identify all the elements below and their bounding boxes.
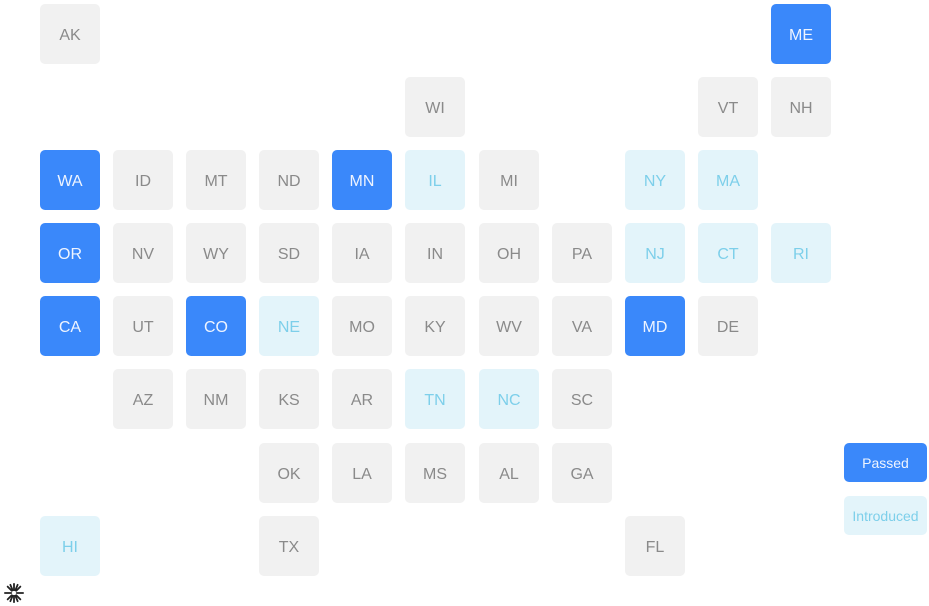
AR: AR	[351, 392, 373, 408]
MO: MO	[349, 318, 375, 336]
OH	[479, 223, 539, 283]
OK: OK	[277, 466, 301, 482]
VA: VA	[572, 318, 592, 336]
OR	[40, 223, 100, 283]
UT	[113, 296, 173, 356]
WV: WV	[496, 318, 522, 336]
NH: NH	[789, 100, 813, 116]
NC	[479, 369, 539, 429]
MN: MN	[350, 172, 374, 190]
legend: passed: Passed	[862, 454, 909, 470]
DE	[698, 296, 758, 356]
NJ: NJ	[645, 246, 665, 262]
icon: logo asterisk	[4, 583, 24, 603]
ME: ME	[789, 26, 813, 44]
NE	[259, 296, 319, 356]
TX: TX	[279, 538, 299, 556]
TN: TN	[424, 392, 446, 408]
GA: GA	[570, 466, 594, 482]
CO	[186, 296, 246, 356]
LA: LA	[352, 466, 372, 482]
IL	[405, 150, 465, 210]
VA	[552, 296, 612, 356]
legend: passed	[844, 443, 927, 482]
NY: NY	[644, 172, 666, 190]
legend	[844, 443, 927, 535]
CT: CT	[717, 246, 739, 262]
SD	[259, 223, 319, 283]
NC: NC	[497, 392, 521, 408]
AZ	[113, 369, 173, 429]
MD	[625, 296, 685, 356]
WI	[405, 77, 465, 137]
WY: WY	[203, 246, 229, 262]
MT: MT	[204, 172, 228, 190]
MT	[186, 150, 246, 210]
MS: MS	[423, 466, 447, 482]
PA: PA	[572, 246, 592, 262]
ND: ND	[277, 172, 301, 190]
ID: ID	[135, 172, 151, 190]
MA: MA	[716, 172, 740, 190]
TN	[405, 369, 465, 429]
NV: NV	[132, 246, 154, 262]
IA	[332, 223, 392, 283]
LA	[332, 443, 392, 503]
TX	[259, 516, 319, 576]
IL: IL	[428, 172, 442, 190]
AK: AK	[59, 26, 81, 44]
IN	[405, 223, 465, 283]
OK	[259, 443, 319, 503]
CO: CO	[204, 318, 228, 336]
CT	[698, 223, 758, 283]
MA	[698, 150, 758, 210]
AR	[332, 369, 392, 429]
HI	[40, 516, 100, 576]
CA	[40, 296, 100, 356]
KS	[259, 369, 319, 429]
KY	[405, 296, 465, 356]
IN: IN	[427, 246, 443, 262]
AL: AL	[499, 466, 519, 482]
ME	[771, 4, 831, 64]
NV	[113, 223, 173, 283]
OR: OR	[58, 246, 82, 262]
WA: WA	[57, 172, 83, 190]
legend: introduced: Introduced	[852, 508, 919, 524]
MO	[332, 296, 392, 356]
KS: KS	[278, 392, 300, 408]
AL	[479, 443, 539, 503]
AK	[40, 4, 100, 64]
NM: NM	[204, 392, 228, 408]
SC	[552, 369, 612, 429]
VT: VT	[718, 100, 738, 116]
FL	[625, 516, 685, 576]
OH: OH	[497, 246, 521, 262]
HI: HI	[62, 538, 78, 556]
NY	[625, 150, 685, 210]
RI	[771, 223, 831, 283]
legend: introduced	[844, 496, 927, 535]
SC: SC	[571, 392, 593, 408]
MI: MI	[500, 172, 518, 190]
VT	[698, 77, 758, 137]
NH	[771, 77, 831, 137]
GA	[552, 443, 612, 503]
WA	[40, 150, 100, 210]
NE: NE	[278, 318, 300, 336]
DE: DE	[717, 318, 739, 336]
MI	[479, 150, 539, 210]
UT: UT	[132, 318, 154, 336]
FL: FL	[646, 538, 664, 556]
NJ	[625, 223, 685, 283]
SD: SD	[278, 246, 300, 262]
WY	[186, 223, 246, 283]
KY: KY	[424, 318, 446, 336]
WV	[479, 296, 539, 356]
WI: WI	[425, 100, 445, 116]
MS	[405, 443, 465, 503]
MN	[332, 150, 392, 210]
PA	[552, 223, 612, 283]
MD: MD	[643, 318, 667, 336]
ND	[259, 150, 319, 210]
ID	[113, 150, 173, 210]
IA: IA	[354, 246, 370, 262]
AZ: AZ	[133, 392, 153, 408]
RI: RI	[793, 246, 809, 262]
NM	[186, 369, 246, 429]
CA: CA	[59, 318, 81, 336]
